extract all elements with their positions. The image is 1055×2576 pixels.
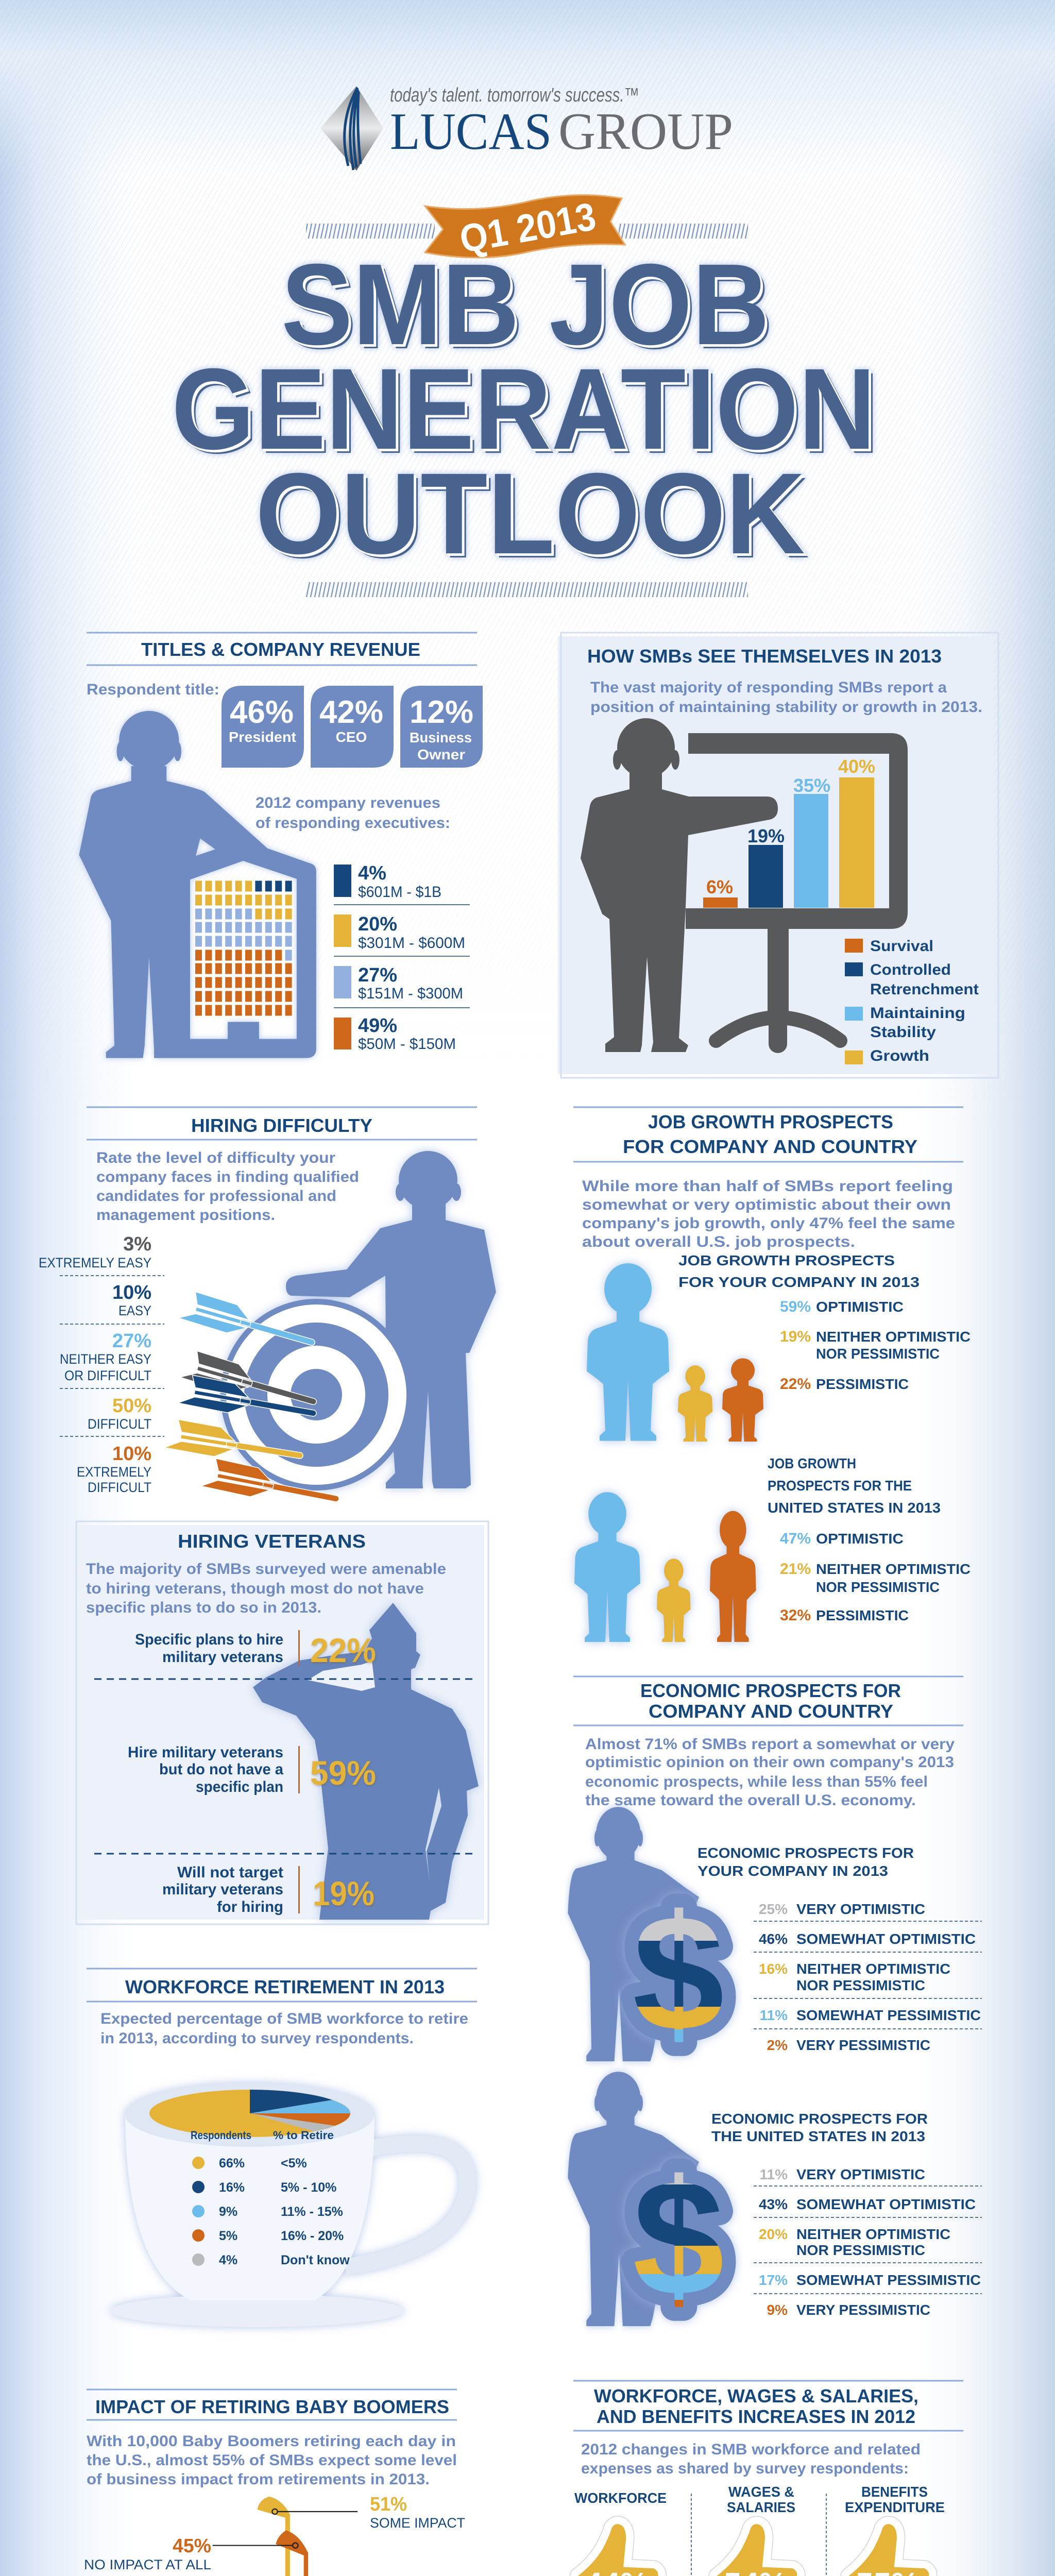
difficulty scale labels: EASY <box>118 1303 151 1318</box>
icon: presenter and board <box>581 718 908 1052</box>
bar chart: 35% <box>793 775 830 796</box>
stats: company <box>780 1298 971 1393</box>
subheading: company: ECONOMIC PROSPECTS FOR <box>697 1845 914 1861</box>
stats: country: OPTIMISTIC <box>816 1531 904 1547</box>
column heads: WORKFORCE <box>574 2490 667 2506</box>
intro text <box>87 2433 457 2488</box>
intro text: The majority of SMBs surveyed were amenable <box>86 1561 446 1578</box>
icon: man with dollar, country <box>568 2072 724 2330</box>
subheading: country: THE UNITED STATES IN 2013 <box>711 2128 925 2144</box>
legend: retirement share: 66% <box>219 2156 245 2171</box>
title: SMB Job Generation Outlook: GENERATION <box>176 349 880 478</box>
bar chart: 19% <box>747 825 785 846</box>
banner: Q1 2013: Q1 2013 <box>456 195 599 261</box>
legend: retirement share: % to Retire <box>273 2129 334 2142</box>
stat tile: business owner: Owner <box>417 747 465 762</box>
intro text: optimistic opinion on their own company's 2013 <box>585 1754 954 1771</box>
title: SMB Job Generation Outlook: OUTLOOK <box>258 451 807 580</box>
difficulty scale labels <box>39 1233 164 1495</box>
panel: workforce, wages and benefits <box>566 2381 963 2576</box>
revenue legend: 49% <box>358 1015 397 1037</box>
panel: titles and company revenue <box>79 633 483 1058</box>
stats: company outlook: 46% <box>759 1931 788 1947</box>
difficulty scale labels: 3% <box>123 1233 151 1255</box>
icon: golf scene <box>212 2497 472 2576</box>
legend: retirement share: Don't know <box>281 2253 350 2267</box>
stat: will not target: Will not target <box>177 1864 283 1881</box>
column heads: SALARIES <box>727 2499 795 2515</box>
stat: specific plans: Specific plans to hire <box>135 1631 283 1648</box>
revenue legend: $601M - $1B <box>358 884 441 901</box>
panel: workforce retirement <box>87 1969 477 2327</box>
heading: AND BENEFITS INCREASES IN 2012 <box>597 2406 915 2427</box>
stats: country outlook: 11% <box>759 2166 788 2182</box>
subheading: country <box>711 2111 928 2144</box>
legend: retirement share: <5% <box>281 2156 307 2171</box>
intro text: position of maintaining stability or growth in 2013. <box>590 699 982 716</box>
stats: company outlook: SOMEWHAT PESSIMISTIC <box>796 2007 981 2023</box>
heading: JOB GROWTH PROSPECTS <box>648 1111 893 1132</box>
revenue legend: $50M - $150M <box>358 1036 456 1053</box>
stats: company: PESSIMISTIC <box>816 1376 909 1392</box>
stat tile: CEO: 42% <box>319 694 383 730</box>
legend: retirement share: 16% - 20% <box>281 2229 344 2243</box>
subheading: company <box>697 1845 914 1879</box>
heading: FOR COMPANY AND COUNTRY <box>623 1136 917 1157</box>
stat: no specific plan: but do not have a <box>159 1761 283 1778</box>
legend: retirement share: 9% <box>219 2205 237 2219</box>
intro text: economic prospects, while less than 55% feel <box>585 1773 928 1790</box>
panel: impact of retiring baby boomers <box>84 2389 484 2576</box>
stats: company: 19% <box>780 1328 811 1345</box>
intro text <box>100 2010 468 2047</box>
column heads <box>574 2484 945 2515</box>
stats: company outlook: VERY OPTIMISTIC <box>796 1901 925 1917</box>
title: SMB Job Generation Outlook: OUTLOOK <box>256 449 805 578</box>
stat: will not target <box>162 1864 375 1916</box>
stats: country: 47% <box>780 1530 811 1547</box>
subheading: company <box>678 1252 920 1290</box>
intro text <box>582 1178 955 1250</box>
intro text: the U.S., almost 55% of SMBs expect some level <box>87 2452 457 2469</box>
legend: Controlled <box>870 961 951 978</box>
revenue legend: 20% <box>358 913 397 935</box>
icon: arrows <box>164 1289 342 1513</box>
stat tile: president: 46% <box>230 694 294 730</box>
column heads: WAGES & <box>728 2484 794 2500</box>
intro text: of business impact from retirements in 2013. <box>87 2471 430 2488</box>
icon: three figures, company <box>587 1263 763 1442</box>
subheading: company: YOUR COMPANY IN 2013 <box>697 1863 888 1879</box>
legend: retirement share: 4% <box>219 2253 237 2267</box>
icon: man with dollar, company <box>568 1807 724 2065</box>
stats: country outlook: 17% <box>759 2272 788 2288</box>
stats: country outlook: 9% <box>767 2302 788 2318</box>
logo: Lucas Group <box>320 84 733 171</box>
stats: company outlook: 2% <box>767 2037 788 2053</box>
stat: specific plans <box>135 1630 376 1669</box>
heading: HOW SMBs SEE THEMSELVES IN 2013 <box>587 646 942 667</box>
stats: company outlook: 16% <box>759 1961 788 1977</box>
stat: no specific plan: 59% <box>310 1754 376 1792</box>
intro text: With 10,000 Baby Boomers retiring each day in <box>87 2433 456 2450</box>
stat: will not target: for hiring <box>217 1899 283 1916</box>
icon: three figures, country <box>574 1492 756 1642</box>
callouts: NO IMPACT AT ALL <box>84 2557 211 2572</box>
title: SMB Job Generation Outlook: SMB JOB <box>283 242 772 371</box>
intro text: The vast majority of responding SMBs report a <box>590 679 947 696</box>
difficulty scale labels: EXTREMELY <box>77 1464 151 1480</box>
difficulty scale labels: 27% <box>112 1330 151 1352</box>
stats: company outlook: NOR PESSIMISTIC <box>796 1977 925 1993</box>
bar chart <box>703 756 875 908</box>
difficulty scale labels: OR DIFFICULT <box>64 1368 151 1383</box>
icon: man with dollar, country: $ <box>633 2145 724 2330</box>
panel: economic prospects <box>568 1676 982 2330</box>
intro text: management positions. <box>96 1207 275 1224</box>
subheading: company: JOB GROWTH PROSPECTS <box>678 1252 895 1268</box>
intro text: Expected percentage of SMB workforce to retire <box>100 2010 468 2027</box>
panel: job growth prospects <box>573 1107 971 1642</box>
bar chart: 6% <box>706 876 733 897</box>
intro text: Rate the level of difficulty your <box>96 1149 335 1166</box>
legend: retirement share <box>191 2129 350 2267</box>
intro text: company's job growth, only 47% feel the same <box>582 1215 955 1232</box>
difficulty scale labels: DIFFICULT <box>88 1480 151 1495</box>
revenue legend: $301M - $600M <box>358 935 465 952</box>
icon: man with target <box>220 1151 496 1490</box>
legend: Retrenchment <box>870 981 979 998</box>
difficulty scale labels: 10% <box>112 1282 151 1303</box>
icon: man leaning on building <box>79 711 316 1058</box>
stat: specific plans: 22% <box>310 1631 376 1669</box>
stats: country outlook: SOMEWHAT PESSIMISTIC <box>796 2272 981 2288</box>
intro text: to hiring veterans, though most do not have <box>86 1580 424 1597</box>
stats: company outlook: NEITHER OPTIMISTIC <box>796 1961 950 1977</box>
difficulty scale labels: EXTREMELY EASY <box>39 1255 151 1270</box>
stat: will not target: military veterans <box>162 1881 283 1898</box>
heading <box>623 1111 917 1157</box>
legend: retirement share: Respondents <box>191 2129 251 2142</box>
title: SMB Job Generation Outlook: SMB JOB <box>285 244 774 373</box>
intro text: expenses as shared by survey respondents: <box>581 2460 909 2477</box>
legend: Growth <box>870 1047 929 1064</box>
difficulty scale labels: 50% <box>112 1395 151 1417</box>
increased stats <box>582 2566 923 2576</box>
stats: country outlook: 43% <box>759 2196 788 2212</box>
stat tile: business owner: 12% <box>410 694 473 730</box>
stats: company outlook <box>754 1901 982 2053</box>
subheading: country <box>768 1455 941 1516</box>
stat tile: business owner: Business <box>410 730 472 745</box>
legend: Stability <box>870 1024 936 1041</box>
revenue legend <box>334 862 470 1053</box>
panel: hiring veterans <box>72 1521 488 1924</box>
heading: WORKFORCE RETIREMENT IN 2013 <box>125 1976 445 1997</box>
intro text: 2012 changes in SMB workforce and related <box>581 2441 921 2458</box>
column heads: BENEFITS <box>861 2484 928 2500</box>
subheading: country: UNITED STATES IN 2013 <box>768 1500 941 1516</box>
intro text: candidates for professional and <box>96 1188 336 1205</box>
bar chart: 40% <box>838 756 875 777</box>
stats: country: PESSIMISTIC <box>816 1607 909 1623</box>
legend: retirement share: 5% - 10% <box>281 2180 336 2195</box>
subheading: country: PROSPECTS FOR THE <box>768 1478 912 1494</box>
stats: country outlook: 20% <box>759 2226 788 2242</box>
icon: man with dollar, company: $ <box>633 1880 724 2065</box>
stat tile: president: President <box>229 729 296 745</box>
callouts: 45% <box>173 2535 211 2557</box>
title: SMB Job Generation Outlook: SMB JOB <box>281 240 770 369</box>
subheading: company: FOR YOUR COMPANY IN 2013 <box>678 1274 920 1290</box>
revenue intro text: of responding executives: <box>256 815 450 832</box>
respondent title label: Respondent title: <box>87 681 219 698</box>
heading <box>594 2385 918 2427</box>
stats: company: OPTIMISTIC <box>816 1299 904 1315</box>
heading <box>640 1680 901 1722</box>
stats: company outlook: 11% <box>759 2007 788 2023</box>
intro text: Almost 71% of SMBs report a somewhat or very <box>585 1736 955 1753</box>
stats: country outlook: NEITHER OPTIMISTIC <box>796 2226 950 2242</box>
intro text: somewhat or very optimistic about their own <box>582 1196 951 1213</box>
callouts <box>84 2494 484 2576</box>
title: SMB Job Generation Outlook: OUTLOOK <box>260 453 809 582</box>
panel: how SMBs see themselves <box>558 633 998 1078</box>
difficulty scale labels: DIFFICULT <box>88 1416 151 1432</box>
icon: saluting soldier <box>253 1603 479 1920</box>
stats: country: NOR PESSIMISTIC <box>816 1579 940 1595</box>
heading: ECONOMIC PROSPECTS FOR <box>640 1680 901 1701</box>
stat tile: CEO: CEO <box>336 729 367 745</box>
revenue legend: 27% <box>358 964 397 986</box>
wordmark: GROUP <box>558 103 733 161</box>
stats: company outlook: VERY PESSIMISTIC <box>796 2037 930 2053</box>
revenue legend: $151M - $300M <box>358 985 463 1002</box>
subheading: country: JOB GROWTH <box>768 1455 856 1471</box>
heading: TITLES & COMPANY REVENUE <box>141 639 420 660</box>
legend: Maintaining <box>870 1005 965 1022</box>
revenue intro text: 2012 company revenues <box>256 794 440 811</box>
heading: HIRING DIFFICULTY <box>191 1115 372 1136</box>
intro text: about overall U.S. job prospects. <box>582 1233 855 1250</box>
icon: target rings <box>226 1304 406 1485</box>
stats: country: NEITHER OPTIMISTIC <box>816 1561 971 1577</box>
decorative hatch bars <box>306 224 748 597</box>
stats: company outlook: 25% <box>759 1901 788 1917</box>
heading: WORKFORCE, WAGES & SALARIES, <box>594 2385 918 2406</box>
icons: thumbs up <box>578 2524 933 2576</box>
stats: country <box>780 1530 971 1624</box>
stats: country outlook: VERY OPTIMISTIC <box>796 2166 925 2182</box>
intro text: company faces in finding qualified <box>96 1168 359 1185</box>
stats: company outlook: SOMEWHAT OPTIMISTIC <box>796 1931 976 1947</box>
heading: COMPANY AND COUNTRY <box>649 1701 893 1722</box>
stats: country outlook <box>754 2166 982 2318</box>
callouts: 51% <box>370 2494 407 2515</box>
legend <box>845 938 979 1064</box>
column heads: EXPENDITURE <box>845 2499 945 2515</box>
stat tile: president <box>222 686 304 768</box>
heading: HIRING VETERANS <box>178 1531 366 1552</box>
stats: company: 22% <box>780 1376 811 1393</box>
icon: coffee cup <box>111 2083 468 2327</box>
legend: retirement share: 16% <box>219 2180 245 2195</box>
legend: retirement share: 11% - 15% <box>281 2205 343 2219</box>
stats: country: 21% <box>780 1561 811 1578</box>
stats: company: NEITHER OPTIMISTIC <box>816 1329 971 1345</box>
building window chart <box>195 886 294 1010</box>
tagline: today's talent. tomorrow's success.™ <box>390 84 639 106</box>
intro text <box>96 1149 359 1224</box>
legend: retirement share: 5% <box>219 2229 237 2243</box>
icon: man with dollar, company: $ <box>633 1880 724 2065</box>
wordmark: LUCAS <box>390 103 552 161</box>
subheading: country: ECONOMIC PROSPECTS FOR <box>711 2111 928 2127</box>
icon: diamond mark <box>320 86 383 171</box>
stats: company: NOR PESSIMISTIC <box>816 1346 940 1362</box>
pie chart: retirement share <box>149 2090 350 2137</box>
intro text: While more than half of SMBs report feeling <box>582 1178 953 1195</box>
intro text <box>590 679 982 716</box>
callouts: SOME IMPACT <box>370 2515 465 2531</box>
difficulty scale labels: NEITHER EASY <box>60 1351 151 1367</box>
title: SMB Job Generation Outlook: GENERATION <box>174 347 878 476</box>
intro text: in 2013, according to survey respondents. <box>100 2030 414 2047</box>
revenue legend: 4% <box>358 862 386 884</box>
legend: Survival <box>870 938 933 955</box>
intro text <box>585 1736 955 1809</box>
stats: country outlook: NOR PESSIMISTIC <box>796 2242 925 2258</box>
stat: no specific plan: specific plan <box>196 1778 283 1795</box>
icon: man with dollar, country: $ <box>633 2145 724 2330</box>
intro text <box>581 2441 921 2477</box>
title: SMB Job Generation Outlook: GENERATION <box>172 345 876 473</box>
intro text <box>86 1561 446 1616</box>
revenue intro text <box>256 794 450 832</box>
title: SMB Job Generation Outlook <box>172 240 880 582</box>
panel: hiring difficulty <box>39 1107 496 1513</box>
dashed separators <box>94 1679 474 1854</box>
stat: specific plans: military veterans <box>162 1649 283 1666</box>
heading: IMPACT OF RETIRING BABY BOOMERS <box>95 2396 449 2417</box>
stat tile: CEO <box>311 686 394 768</box>
intro text: specific plans to do so in 2013. <box>86 1599 321 1616</box>
stats: company: 59% <box>780 1298 811 1315</box>
stat: no specific plan <box>128 1744 376 1795</box>
stats: country: 32% <box>780 1607 811 1624</box>
stat tile: business owner <box>400 686 483 768</box>
stats: country outlook: VERY PESSIMISTIC <box>796 2302 930 2318</box>
stat: no specific plan: Hire military veterans <box>128 1744 283 1761</box>
stats: country outlook: SOMEWHAT OPTIMISTIC <box>796 2196 976 2212</box>
intro text: the same toward the overall U.S. economy. <box>585 1792 916 1809</box>
stat: will not target: 19% <box>313 1874 375 1912</box>
difficulty scale labels: 10% <box>112 1443 151 1465</box>
